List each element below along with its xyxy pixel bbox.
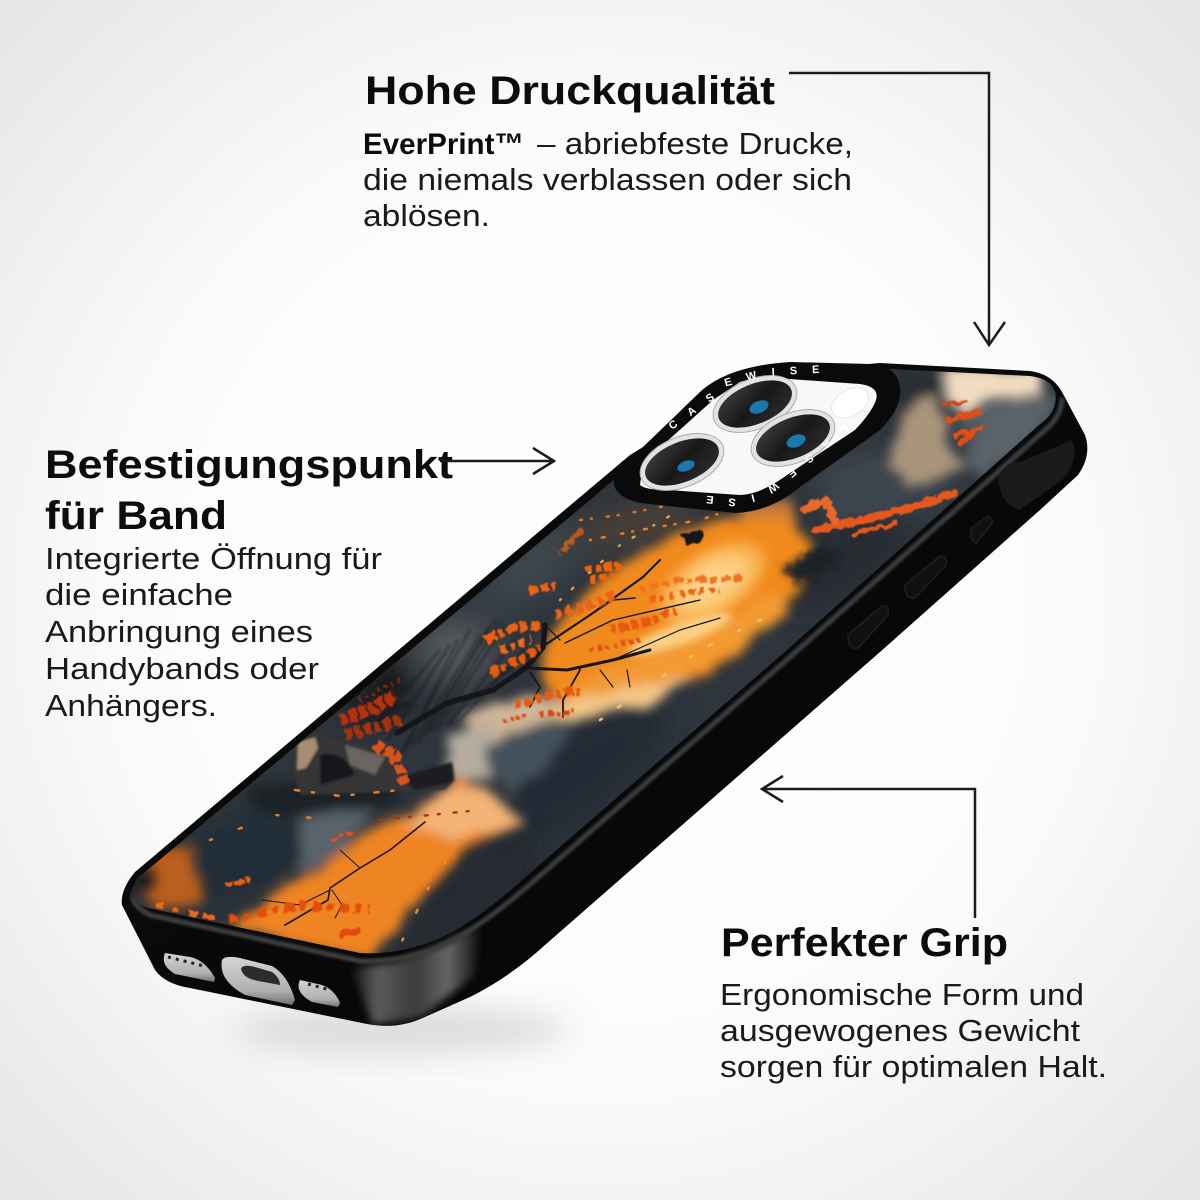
description: Anhängers. <box>45 688 217 723</box>
painted masses <box>130 366 1060 958</box>
orange band strokes <box>805 402 978 534</box>
heading: Perfekter Grip <box>721 921 1008 965</box>
description <box>363 126 853 233</box>
brand text lower: CASEWISE <box>706 439 830 506</box>
scattered embers <box>210 505 780 945</box>
heading: für Band <box>45 494 227 538</box>
description: die einfache <box>45 577 233 612</box>
camera plate <box>640 378 877 495</box>
side buttons <box>848 516 993 648</box>
orange leaves <box>155 530 745 935</box>
case body <box>122 363 1087 1026</box>
phone case <box>122 362 1088 1026</box>
description <box>720 977 1107 1084</box>
description <box>45 541 382 723</box>
lens left <box>632 422 732 502</box>
flash <box>826 382 874 424</box>
arrow: grip <box>762 776 975 918</box>
description: Handybands oder <box>45 651 319 686</box>
orange halo <box>533 512 820 711</box>
camera island <box>614 362 900 513</box>
reflection leaves <box>225 880 250 885</box>
heading: Hohe Druckqualität <box>365 69 775 113</box>
tree <box>262 560 720 925</box>
camera frame <box>614 362 900 513</box>
lens top <box>705 364 805 444</box>
horse figure <box>880 392 965 490</box>
painted back panel <box>132 369 1056 954</box>
reflection <box>285 822 425 925</box>
description: – abriebfeste Drucke, <box>537 126 853 161</box>
phone shadow <box>230 1006 570 1054</box>
glossy corner <box>352 925 480 1024</box>
dark smudges <box>680 530 840 585</box>
strap attachment point <box>998 440 1074 510</box>
distant bare trees <box>388 620 530 754</box>
description: Ergonomische Form und <box>720 977 1084 1012</box>
heading <box>45 443 453 538</box>
sky <box>945 366 1045 420</box>
arrow: strap attachment <box>440 448 554 474</box>
description: die niemals verblassen oder sich <box>363 162 852 197</box>
action button <box>971 516 993 543</box>
pale streak <box>540 680 690 722</box>
river <box>225 778 523 958</box>
heading: Befestigungspunkt <box>45 443 453 487</box>
bottom ports <box>164 953 340 1007</box>
callout: strap attachment <box>45 443 453 723</box>
left speaker <box>164 953 215 982</box>
sun glow <box>654 537 770 625</box>
callout: print quality <box>363 69 853 233</box>
dark shore right of river <box>385 830 540 960</box>
USB-C port <box>221 957 295 1005</box>
right speaker <box>298 980 340 1007</box>
arrow: print quality <box>789 73 1005 345</box>
lens right <box>743 398 843 478</box>
callout: grip <box>720 921 1107 1084</box>
brand text upper: CASEWISE <box>669 365 820 428</box>
description: EverPrint™ <box>363 128 524 161</box>
volume up <box>905 556 946 598</box>
warm patch under camera <box>730 492 804 532</box>
description: ausgewogenes Gewicht <box>720 1013 1080 1048</box>
screen rim highlight <box>133 398 1062 961</box>
description: ablösen. <box>363 198 490 233</box>
volume down <box>848 606 888 648</box>
soft colour masses <box>207 396 1052 903</box>
dark red foliage <box>340 680 405 785</box>
description: Integrierte Öffnung für <box>45 541 382 576</box>
description: sorgen für optimalen Halt. <box>720 1049 1107 1084</box>
description: Anbringung eines <box>45 614 313 649</box>
rocks <box>293 737 455 795</box>
